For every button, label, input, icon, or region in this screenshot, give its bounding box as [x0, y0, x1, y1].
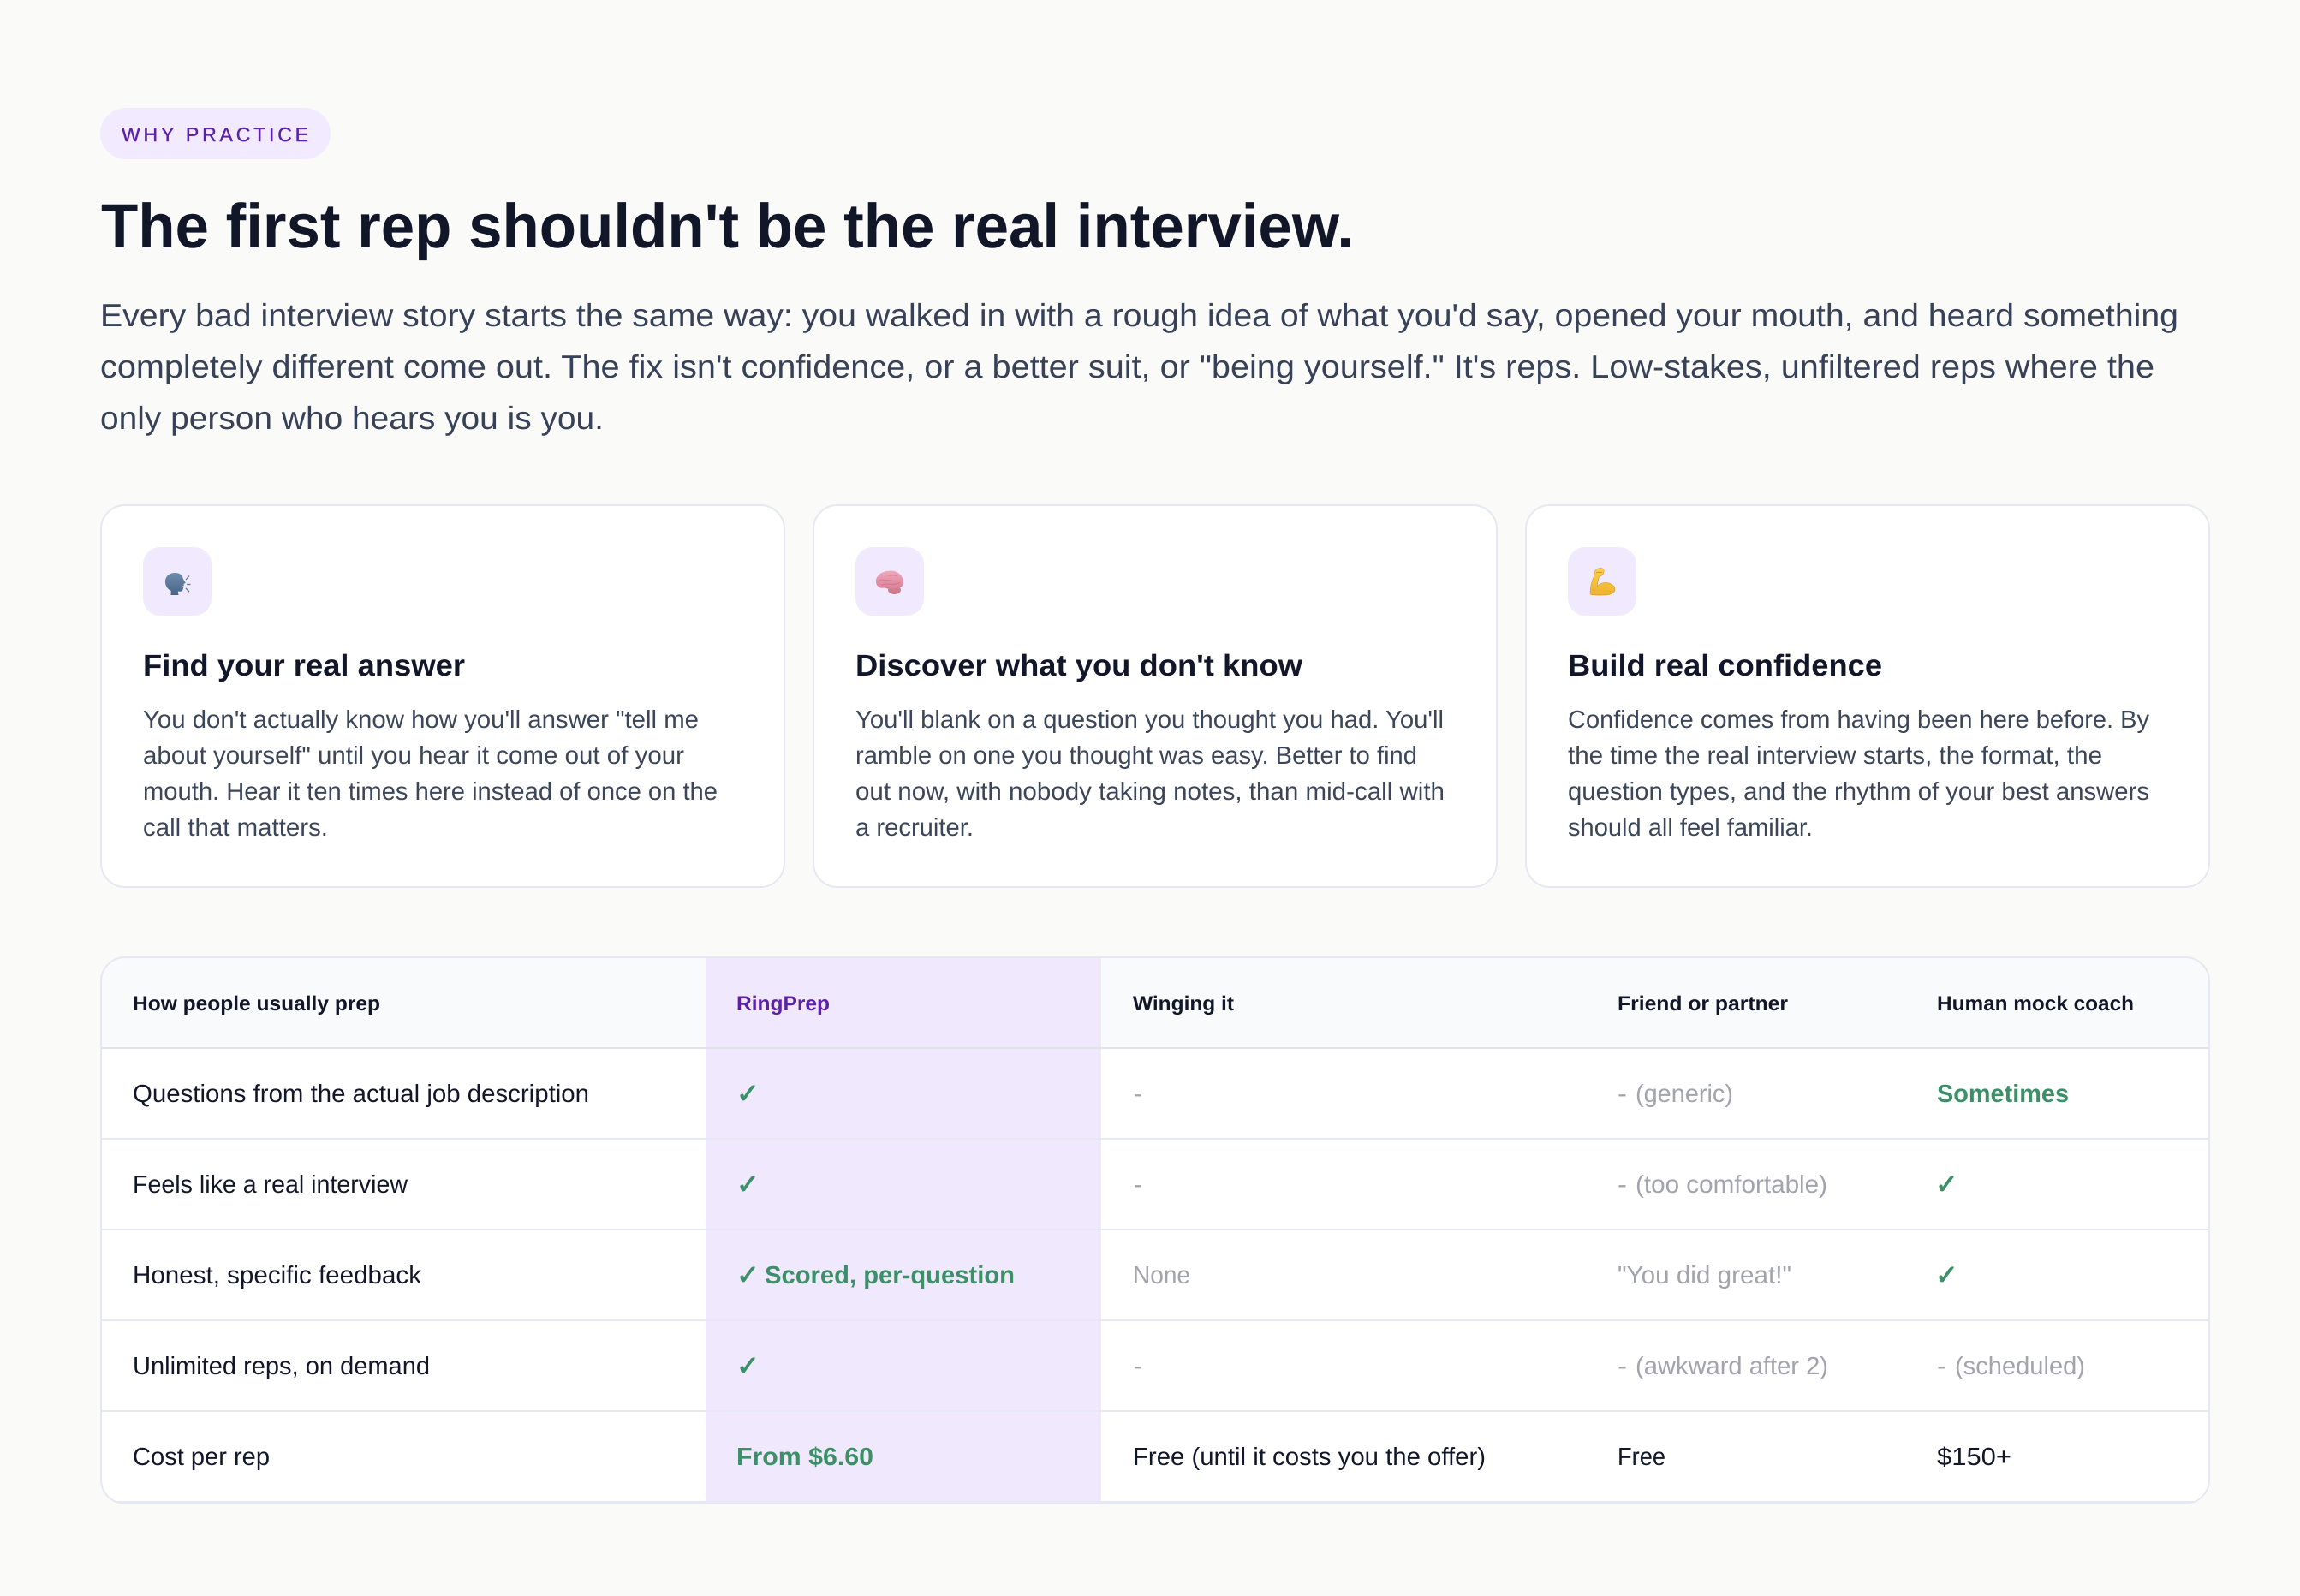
row: honest, specific feedback: ✓: [736, 1259, 760, 1291]
intro paragraph: completely different come out. The fix isn't confidence, or a better suit, or "being yourself." It's reps. Low-stakes, unfiltered reps where the: [100, 348, 2154, 384]
row: unlimited reps, on demand: Unlimited reps, on demand: [133, 1353, 430, 1380]
table header row: Human mock coach: [1937, 992, 2134, 1015]
row: unlimited reps, on demand: ✓: [736, 1349, 760, 1382]
table header row: RingPrep: [736, 992, 830, 1015]
table header row: [133, 992, 2134, 1015]
eyebrow pill: why practice: WHY PRACTICE: [122, 123, 308, 146]
card text: Confidence comes from having been here before. By: [1568, 706, 2149, 734]
eyebrow pill: why practice: [100, 108, 331, 159]
row: honest, specific feedback: None: [1133, 1262, 1190, 1289]
panel: find your real answer: [101, 505, 784, 887]
row: unlimited reps, on demand: (awkward after 2): [1636, 1353, 1828, 1380]
card text: You don't actually know how you'll answer "tell me: [143, 706, 699, 734]
icon: flexed biceps: [1568, 547, 1636, 616]
row: honest, specific feedback: ✓: [1935, 1259, 1958, 1291]
row: questions from the actual job description: [133, 1077, 2069, 1110]
row: honest, specific feedback: Scored, per-question: [765, 1262, 1015, 1289]
intro paragraph: Every bad interview story starts the same way: you walked in with a rough idea of what you'd say, opened your mouth, and heard something: [100, 297, 2178, 333]
row: feels like a real interview: ✓: [736, 1168, 760, 1200]
card heading: Discover what you don't know: [855, 649, 1303, 682]
row: cost per rep: From $6.60: [736, 1444, 873, 1471]
row: feels like a real interview: Feels like a real interview: [133, 1171, 408, 1199]
card text: out now, with nobody taking notes, than mid-call with: [855, 778, 1445, 806]
row: questions from the actual job description: Questions from the actual job description: [133, 1081, 589, 1108]
card text: ramble on one you thought was easy. Better to find: [855, 742, 1417, 770]
card text: mouth. Hear it ten times here instead of once on the: [143, 778, 718, 806]
row: cost per rep: [133, 1444, 2011, 1471]
card text: a recruiter.: [855, 814, 974, 842]
row: feels like a real interview: [133, 1168, 1958, 1200]
row: feels like a real interview: (too comfortable): [1636, 1171, 1827, 1199]
card text: the time the real interview starts, the format, the: [1568, 742, 2102, 770]
comparison table: [101, 957, 2209, 1504]
title: The first rep shouldn't be the real interview.: [101, 192, 1354, 261]
intro paragraph: [100, 297, 2178, 436]
table header row: Winging it: [1133, 992, 1234, 1015]
panel: discover what you don't know: [813, 505, 1497, 887]
table header row: Friend or partner: [1618, 992, 1788, 1015]
panel: build real confidence: [1526, 505, 2209, 887]
card text: You'll blank on a question you thought you had. You'll: [855, 706, 1444, 734]
card heading: Build real confidence: [1568, 649, 1882, 682]
card text: [143, 706, 718, 842]
row: honest, specific feedback: "You did great!": [1618, 1262, 1791, 1289]
card text: [855, 706, 1445, 842]
icon: speaking head: [143, 547, 212, 616]
row: unlimited reps, on demand: [133, 1349, 2085, 1382]
card text: should all feel familiar.: [1568, 814, 1813, 842]
row: feels like a real interview: -: [1618, 1171, 1627, 1199]
row: unlimited reps, on demand: -: [1618, 1353, 1627, 1380]
table header row: How people usually prep: [133, 992, 380, 1015]
row: cost per rep: Free (until it costs you the offer): [1133, 1444, 1486, 1471]
row: cost per rep: $150+: [1937, 1444, 2011, 1471]
row: questions from the actual job description: Sometimes: [1937, 1081, 2069, 1108]
row: cost per rep: Cost per rep: [133, 1444, 270, 1471]
row: honest, specific feedback: Honest, specific feedback: [133, 1262, 421, 1289]
row: unlimited reps, on demand: -: [1134, 1353, 1142, 1380]
row: feels like a real interview: -: [1134, 1171, 1142, 1199]
card heading: Find your real answer: [143, 649, 465, 682]
card text: about yourself" until you hear it come out of your: [143, 742, 684, 770]
row: questions from the actual job description: -: [1618, 1081, 1627, 1108]
row: feels like a real interview: ✓: [1935, 1168, 1958, 1200]
row: questions from the actual job description: (generic): [1636, 1081, 1733, 1108]
card text: [1568, 706, 2149, 842]
row: cost per rep: Free: [1618, 1444, 1665, 1471]
card text: question types, and the rhythm of your best answers: [1568, 778, 2149, 806]
row: unlimited reps, on demand: (scheduled): [1955, 1353, 2085, 1380]
icon: brain: [855, 547, 924, 616]
row: unlimited reps, on demand: -: [1937, 1353, 1946, 1380]
row: questions from the actual job description: ✓: [736, 1077, 760, 1110]
row: questions from the actual job description: -: [1134, 1081, 1142, 1108]
intro paragraph: only person who hears you is you.: [100, 400, 604, 436]
row: honest, specific feedback: [133, 1259, 1958, 1291]
card text: call that matters.: [143, 814, 328, 842]
